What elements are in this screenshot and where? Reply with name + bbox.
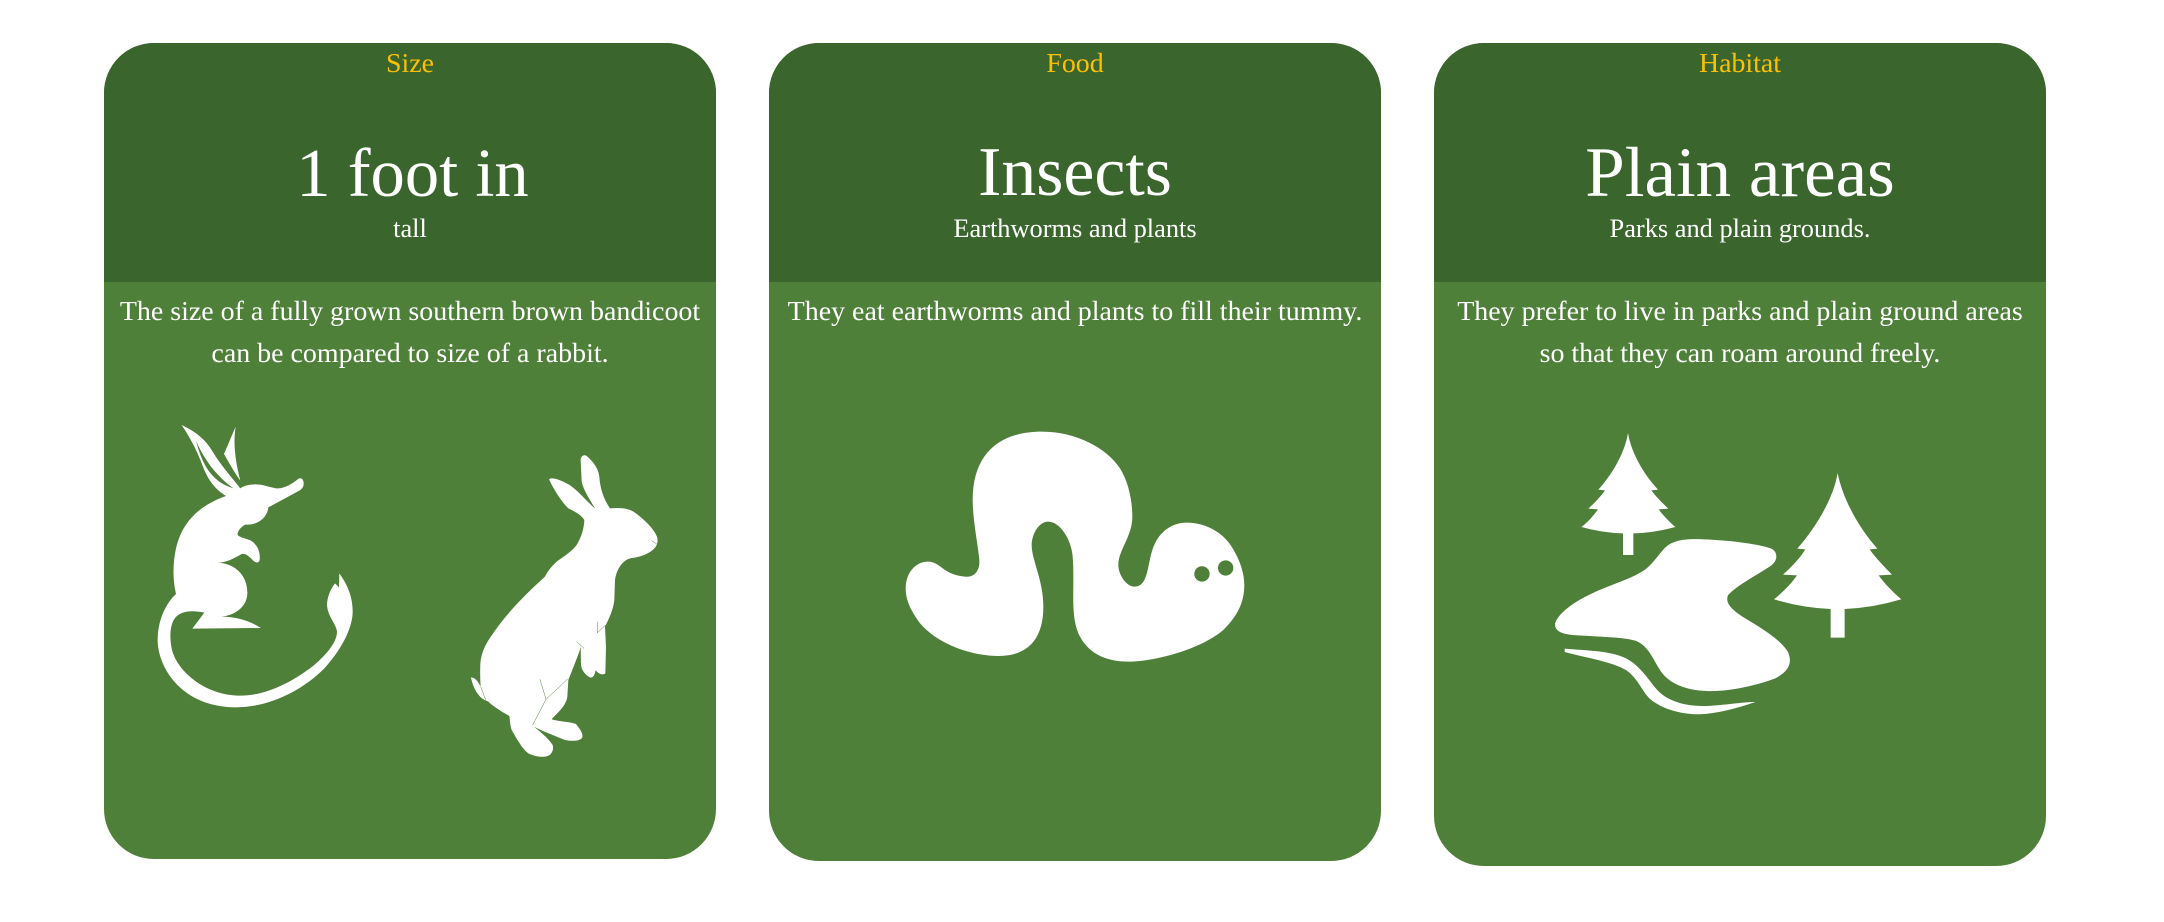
header band: food [769,43,1381,282]
heading: Food: Food [1046,48,1104,79]
panel: size [104,43,716,859]
big value: Insects: Insects [978,134,1172,211]
heading: Size: Size [386,48,434,79]
big value: Plain areas: Plain areas [1585,134,1895,212]
header band: size [104,43,716,282]
header band: habitat [1434,43,2046,282]
icon: trees and lake [1555,433,1902,714]
big value: 1 foot in: 1 foot in [296,135,529,211]
icon: bandicoot silhouette [158,425,353,708]
description line 2: habitat: so that they can roam around freely. [1540,338,1940,369]
description line 1: habitat: They prefer to live in parks and plain ground areas [1457,296,2023,327]
description line 2: size: can be compared to size of a rabbit. [211,338,609,369]
panel: habitat [1434,43,2046,866]
panel: food [769,43,1381,861]
subheading: tall: tall [393,213,427,243]
description: food: They eat earthworms and plants to fill their tummy. [788,296,1362,327]
icon: rabbit silhouette [471,455,658,757]
heading: Habitat: Habitat [1699,48,1781,79]
subheading: earthworms and plants: Earthworms and plants [953,213,1197,243]
subheading: parks and plain grounds: Parks and plain grounds. [1610,213,1870,243]
icon: worm [906,432,1244,662]
description line 1: size: The size of a fully grown southern brown bandicoot [120,296,700,327]
